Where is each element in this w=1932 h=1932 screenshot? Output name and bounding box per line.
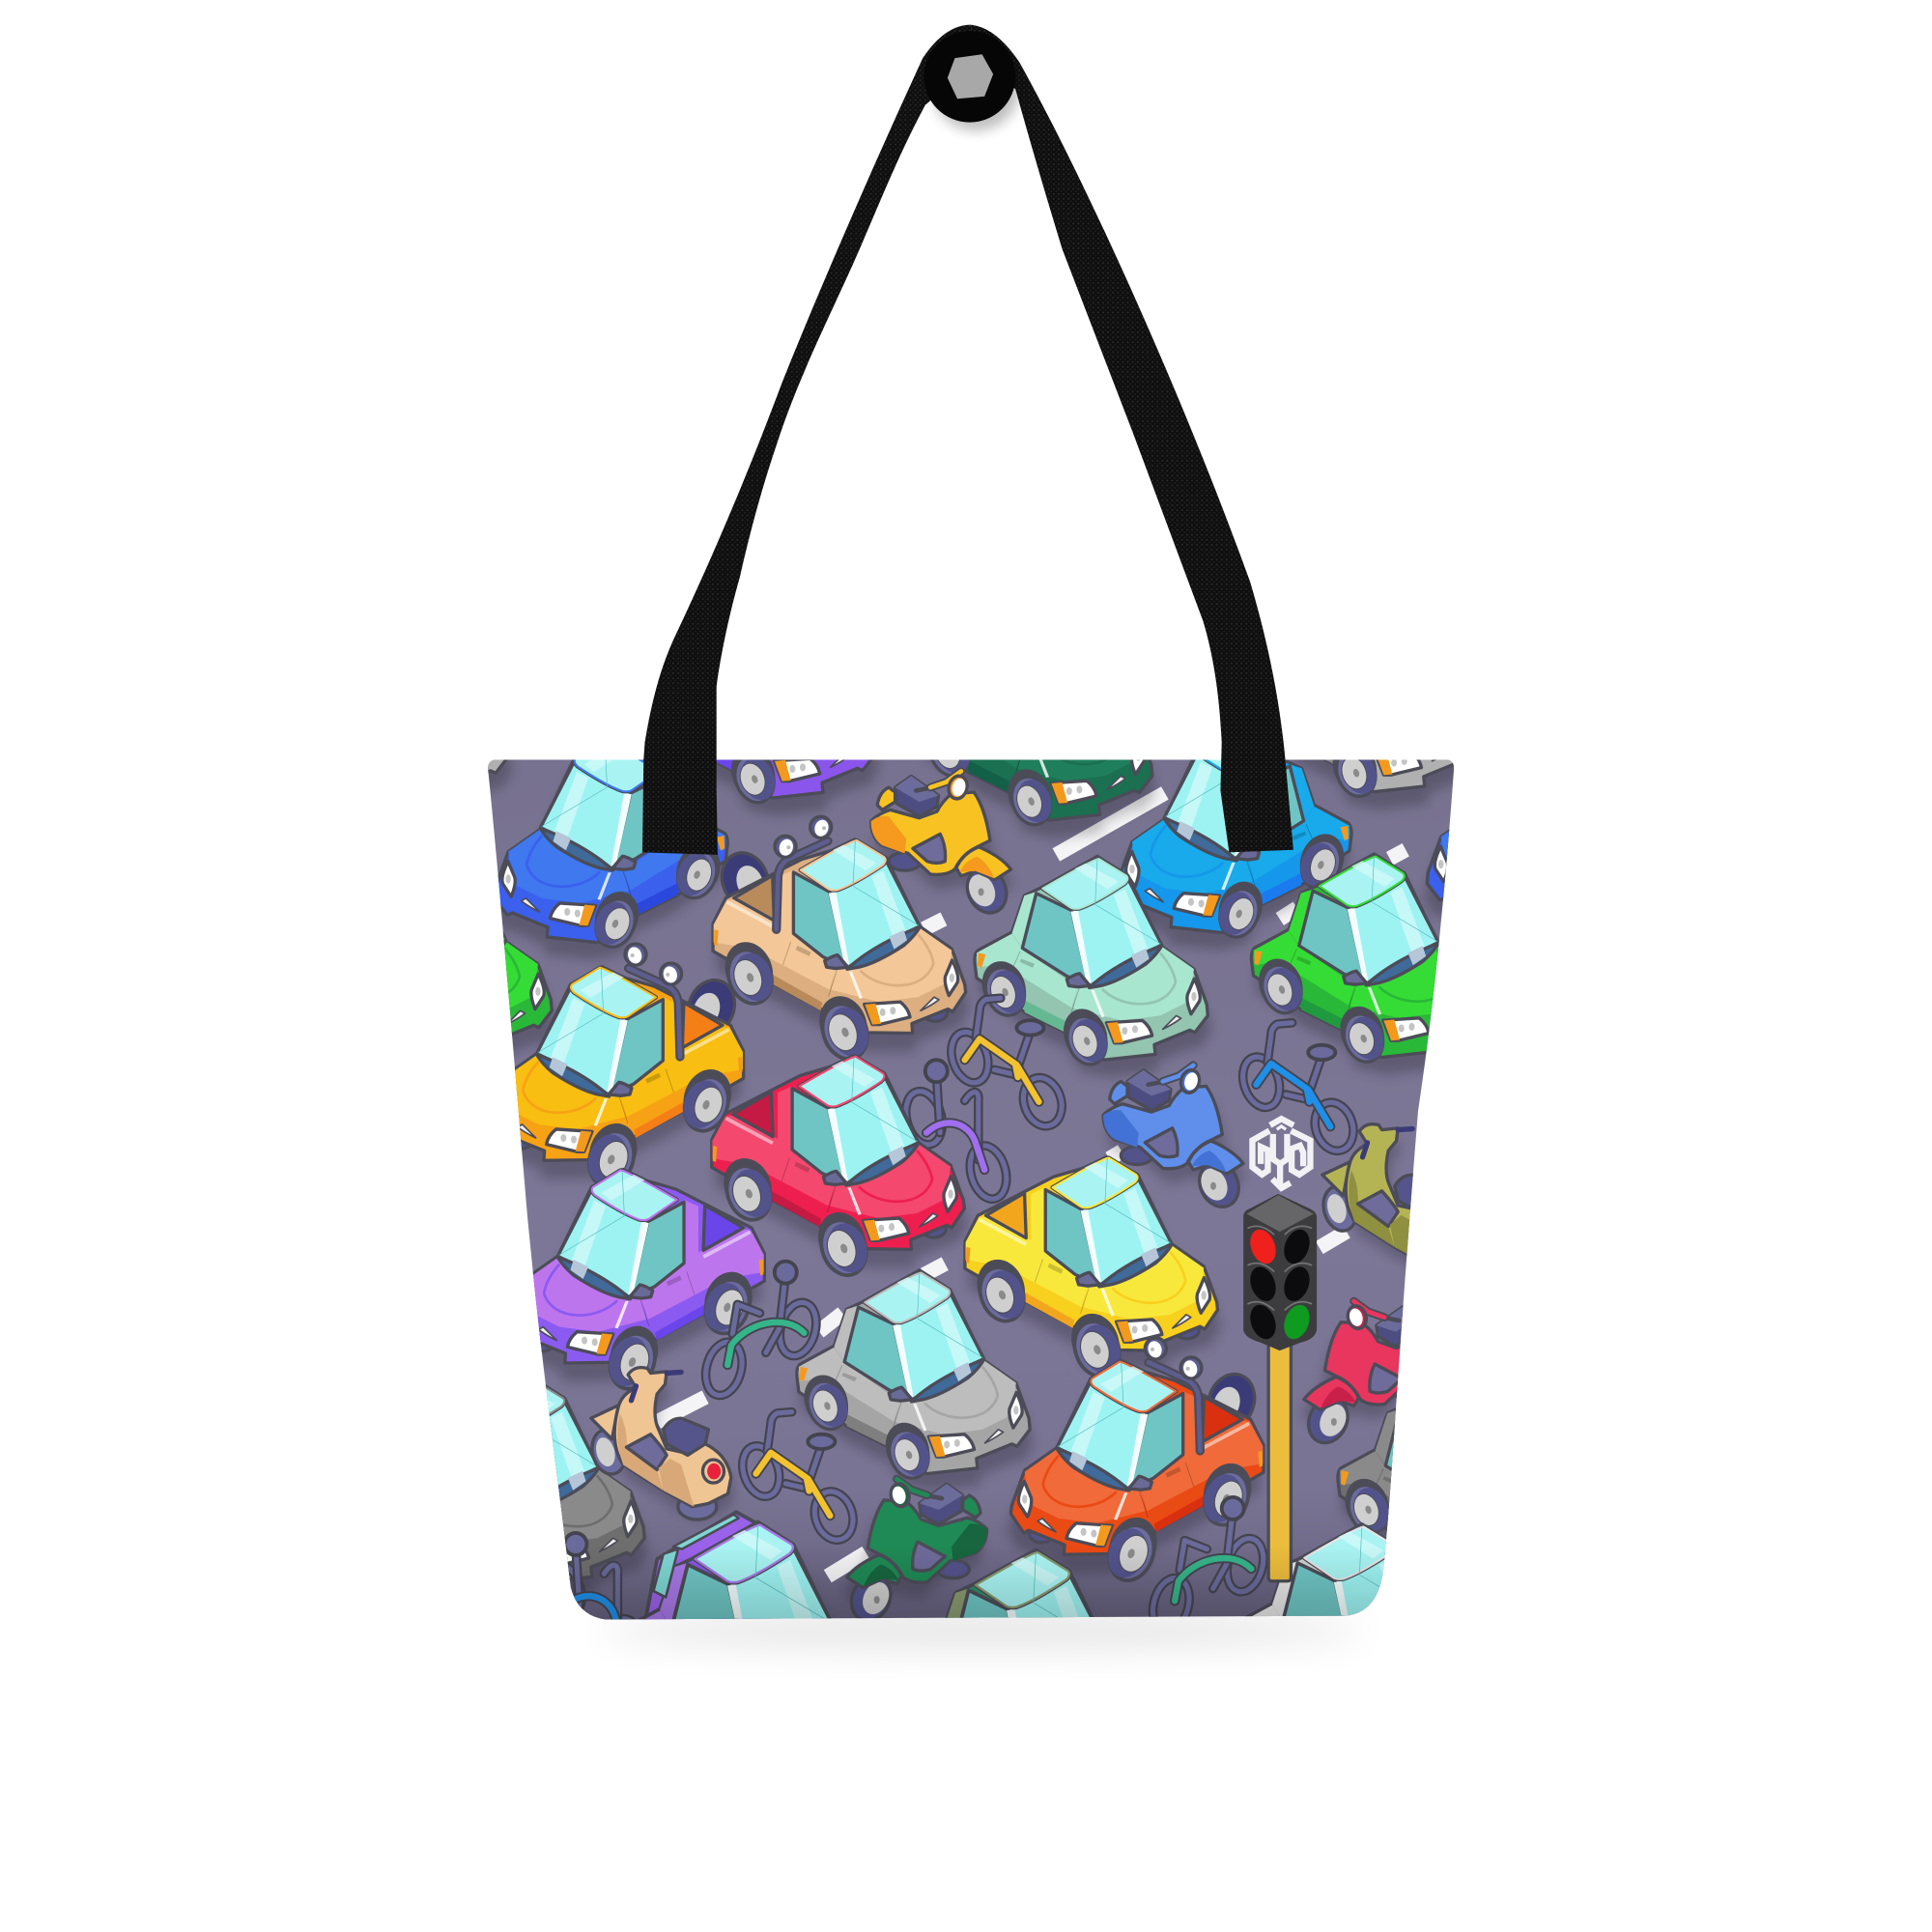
car: right edge blue [1421, 829, 1449, 920]
car: bottom violet rear window [653, 1515, 739, 1597]
car: left edge green [502, 931, 556, 1057]
pickup: amber [514, 942, 746, 1183]
bicycle: yellow lower [736, 1412, 859, 1545]
car: top left corner silver [488, 759, 514, 794]
pickup: yellow [965, 1157, 1221, 1383]
car: bottom white [1244, 1522, 1387, 1617]
car: lower right dark grey [1336, 1407, 1397, 1538]
traffic pattern [275, 588, 1661, 1793]
scooter: olive [1321, 1122, 1415, 1268]
floor shadow [599, 1613, 1365, 1648]
traffic light pole [1268, 1343, 1291, 1581]
lamp hoods [1247, 1226, 1312, 1310]
traffic light housing [1243, 1194, 1317, 1350]
car: silver [797, 1270, 1033, 1492]
bottom fold shading [488, 1544, 1454, 1621]
car: bottom olive [945, 1548, 1094, 1618]
bag fabric [488, 759, 1454, 1619]
pickup: purple [508, 1169, 764, 1395]
panel: tote bag printed body [488, 759, 1455, 1619]
car: blue [492, 739, 727, 960]
logo mark [1252, 1119, 1310, 1188]
car: lower left dark grey [545, 1384, 651, 1595]
scooter: yellow [871, 771, 1014, 920]
bicycle: purple [900, 1060, 1012, 1203]
green lamp [1280, 1301, 1314, 1343]
bicycle: blue bottom [564, 1531, 637, 1619]
traffic light top face [1246, 1195, 1314, 1232]
peg base [924, 31, 1015, 123]
red lamp [1246, 1226, 1280, 1267]
car: bottom violet rear body [643, 1510, 756, 1619]
car: green [1250, 852, 1439, 1078]
pickup: orange red [1008, 1338, 1264, 1587]
car: bottom violet [637, 1520, 832, 1619]
car: top dark green [925, 759, 1160, 842]
left strap [642, 25, 976, 855]
scooter: red [1300, 1296, 1404, 1445]
bicycle: yellow [946, 998, 1067, 1131]
scooter: blue [1103, 1065, 1246, 1213]
traffic light [1243, 1194, 1317, 1581]
bicycle: green lower [1148, 1495, 1267, 1617]
peg [924, 31, 1020, 131]
scooter: dark green [843, 1479, 987, 1627]
car: top purple [717, 759, 881, 819]
pickup: red [712, 1056, 968, 1282]
pickup: tan [713, 816, 969, 1065]
car: sky blue [1121, 759, 1353, 953]
road markings [657, 793, 1406, 1577]
right strap [971, 25, 1293, 852]
car: mint [975, 856, 1211, 1077]
peg hole [948, 54, 993, 99]
bicycle: blue [1236, 1023, 1359, 1155]
car: top right silver [1289, 759, 1454, 812]
bicycle: green [700, 1262, 822, 1400]
peg shadow [931, 42, 1020, 131]
unlit lamps [1246, 1226, 1314, 1343]
scooter: tan [587, 1368, 734, 1520]
